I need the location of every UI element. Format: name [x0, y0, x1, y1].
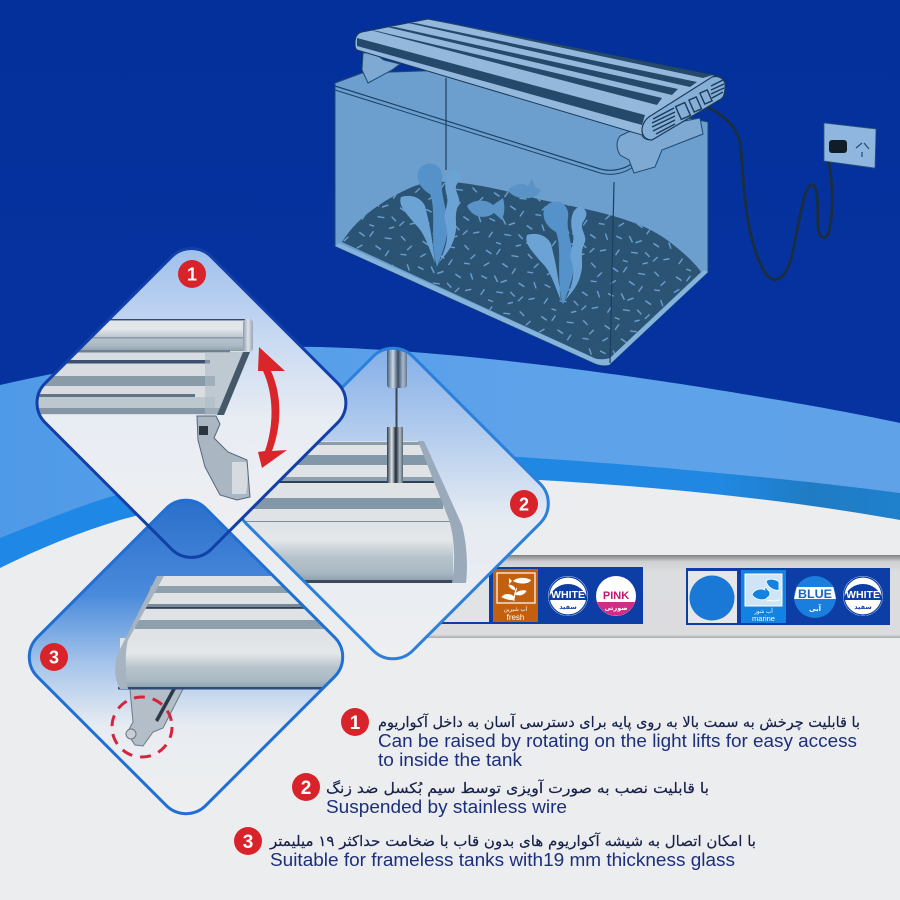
hinge bracket	[197, 416, 250, 500]
panel: marine lamp colours	[686, 568, 890, 625]
panel 1 outline	[25, 237, 357, 569]
icon: white lamp badge: سفید	[854, 603, 872, 611]
icon: pink lamp badge: PINK	[603, 590, 629, 602]
icon: blue lamp badge	[794, 576, 836, 618]
gravel	[342, 182, 701, 360]
light body	[355, 19, 725, 140]
number badge 3: 3	[243, 832, 253, 853]
number badge 1: 1	[350, 713, 361, 734]
feature 2 text	[292, 773, 709, 817]
end cap	[642, 77, 725, 140]
icon: blue lamp badge: BLUE	[798, 589, 832, 601]
panel 3 outline	[18, 489, 354, 825]
vertical glass corners	[446, 78, 614, 363]
panel 3: frameless tank clip	[28, 498, 344, 816]
badge 1: 1	[187, 264, 197, 284]
plants right	[526, 201, 586, 305]
number badge 3	[234, 827, 262, 855]
English line 2: Suspended by stainless wire	[326, 796, 567, 817]
plants left	[400, 163, 460, 267]
badge 2: 2	[519, 494, 529, 514]
dashed highlight circle	[112, 697, 172, 757]
icon: fresh water: آب شیرین	[504, 606, 528, 613]
badge 2	[510, 490, 538, 518]
light body	[115, 576, 360, 690]
light body	[244, 441, 467, 583]
icon: blue circle	[690, 576, 734, 620]
clip bracket	[126, 689, 183, 746]
colour strip	[420, 555, 900, 638]
wave: white lower area	[0, 478, 900, 900]
icon: white lamp badge: WHITE	[846, 590, 880, 601]
wave: light blue band	[0, 347, 900, 620]
light body	[20, 319, 253, 415]
icon: blue lamp badge: آبی	[809, 604, 822, 613]
panel 2 outline	[226, 337, 560, 670]
number badge 2	[292, 773, 320, 801]
power outlet	[824, 123, 876, 168]
fish	[467, 178, 541, 220]
icon: pink lamp badge	[596, 576, 636, 616]
number badge 2: 2	[301, 778, 311, 799]
right bracket	[617, 118, 703, 173]
English line 1: Can be raised by rotating on the light lifts for easy access	[378, 730, 857, 751]
glass edge bottom	[335, 243, 708, 365]
illustration: LED light fixture	[355, 19, 725, 173]
wave: mid blue band	[0, 454, 900, 620]
rotation arrow	[258, 347, 287, 468]
number badge 1	[341, 708, 369, 736]
icon: pink lamp badge: صورتی	[604, 604, 628, 612]
dark stripes	[357, 19, 713, 125]
tank rim	[335, 86, 633, 170]
panel: fresh water lamp colours	[440, 567, 643, 624]
left bracket	[362, 52, 400, 83]
vents and logo	[652, 80, 724, 134]
English line 3: Suitable for frameless tanks with19 mm thickness glass	[270, 849, 735, 870]
Persian line 3: با امکان اتصال به شیشه آکواریوم های بدون قاب با ضخامت حداکثر ۱۹ میلیمتر	[269, 832, 756, 850]
icon: fresh water	[493, 569, 538, 622]
badge 3: 3	[49, 648, 59, 668]
icon: white lamp badge	[548, 576, 588, 616]
icon: fresh water: fresh	[507, 613, 524, 622]
icon: white lamp badge: سفید	[559, 603, 577, 611]
feature 3 text	[234, 827, 756, 870]
panel 2: suspended light	[242, 346, 550, 660]
badge 1	[178, 260, 206, 288]
icon: marine water	[741, 570, 786, 623]
illustration: aquarium tank	[335, 70, 710, 365]
feature 1 text	[341, 708, 860, 770]
English line 1 continued: to inside the tank	[378, 749, 523, 770]
icon: marine water: آب شور	[753, 608, 773, 615]
icon: white lamp badge: WHITE	[551, 590, 585, 601]
icon: white lamp badge	[843, 576, 883, 616]
power cord	[708, 107, 832, 280]
stainless wire hanger	[387, 348, 407, 483]
icon: marine water: marine	[752, 614, 775, 623]
badge 3	[40, 643, 68, 671]
tank body	[335, 70, 708, 365]
panel 1: rotating light	[38, 250, 344, 518]
Persian line 1: با قابلیت چرخش به سمت بالا به روی پایه برای دسترسی آسان به داخل آکواریوم	[378, 713, 860, 731]
Persian line 2: با قابلیت نصب به صورت آویزی توسط سیم بُکسل ضد زنگ	[326, 779, 709, 797]
